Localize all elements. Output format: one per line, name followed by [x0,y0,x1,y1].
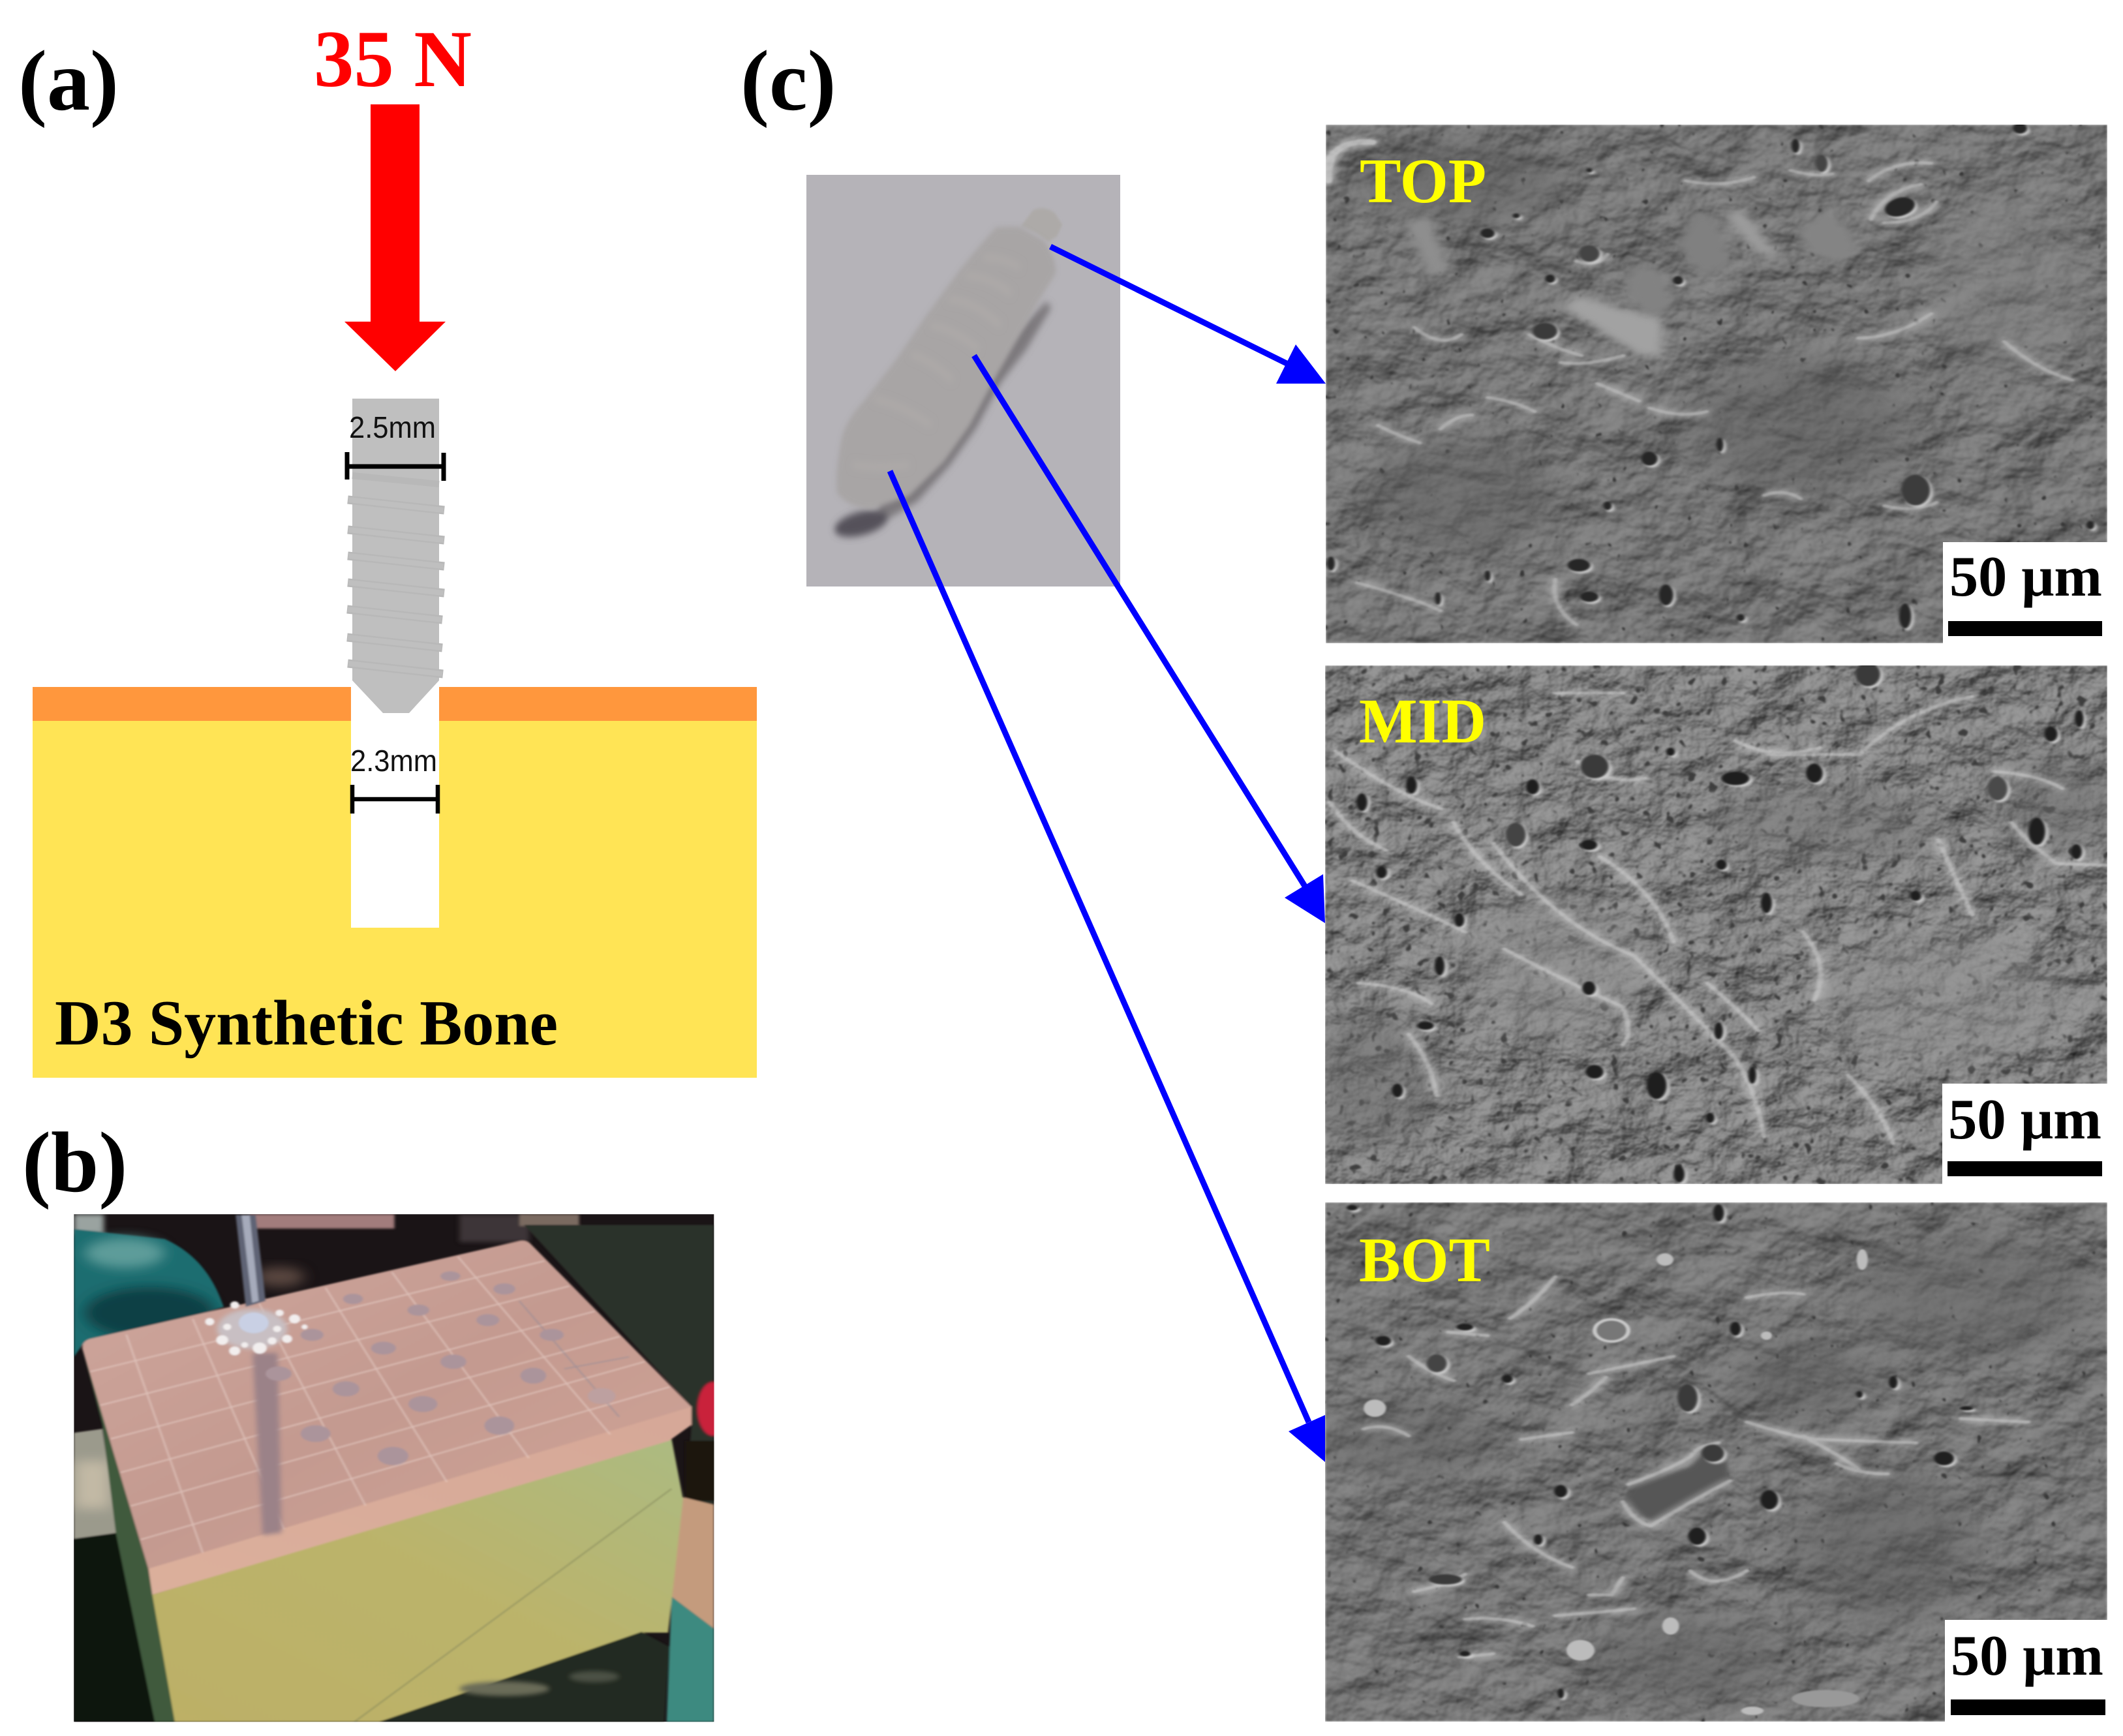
SEM MID surface features [1302,662,2113,1183]
drilled holes [266,1272,616,1465]
foam scribe line [354,1489,671,1722]
block front yellow foam face [152,1439,683,1722]
implant stub [1021,208,1062,241]
implant shadow [832,302,1052,542]
panel: (b) photo of drilled bone block [74,1214,729,1722]
image: SEM MID [1302,662,2113,1184]
dimension 2.5mm [347,410,444,481]
scale bar MID [1942,1084,2107,1184]
dimension 2.5mm: 2.5mm [349,410,436,444]
panel label (b): (b) [22,1114,127,1210]
scale bar BOT [1945,1620,2107,1722]
panel: (a) implant loading diagram [18,14,757,1078]
drill bit [236,1215,266,1307]
scale bar MID: 50 μm [1948,1088,2101,1151]
arrow: implant bottom to SEM BOT [890,471,1325,1462]
panel label (c): (c) [741,33,836,129]
arrow: implant top to SEM TOP [1050,247,1326,384]
scale bar TOP [1943,542,2107,643]
dimension 2.3mm: 2.3mm [350,744,437,778]
panel label (a): (a) [18,33,119,129]
image: SEM TOP [1326,123,2107,643]
block pink top face [82,1241,692,1569]
scribed grid [91,1256,669,1553]
scale bar BOT: 50 μm [1951,1624,2103,1688]
label D3 Synthetic Bone: D3 Synthetic Bone [55,988,558,1059]
drill shadow [252,1353,282,1535]
synthetic bone block [33,685,757,1078]
block left edge [82,1349,175,1722]
icon: threaded implant [347,399,444,713]
drilling chips [206,1302,307,1355]
line marks at right [519,1301,629,1417]
implant body [836,226,1056,509]
force label 35 N: 35 N [314,14,472,104]
photo background objects [74,1214,729,1722]
scale bar TOP: 50 μm [1949,545,2102,609]
arrow: implant middle to SEM MID [974,356,1325,923]
label TOP: TOP [1360,146,1486,217]
label BOT: BOT [1359,1225,1490,1296]
SEM TOP surface features [1326,123,2094,628]
implant thread highlights [853,258,1020,467]
label MID: MID [1359,686,1486,757]
metal vise [380,1632,669,1722]
dimension 2.3mm [350,744,438,814]
SEM BOT surface features [1324,1204,2096,1715]
image: SEM BOT [1324,1202,2107,1722]
arrow: red downward force [344,104,446,371]
panel: (c) implant photo [806,175,1120,586]
block pink cortical band [148,1406,692,1594]
